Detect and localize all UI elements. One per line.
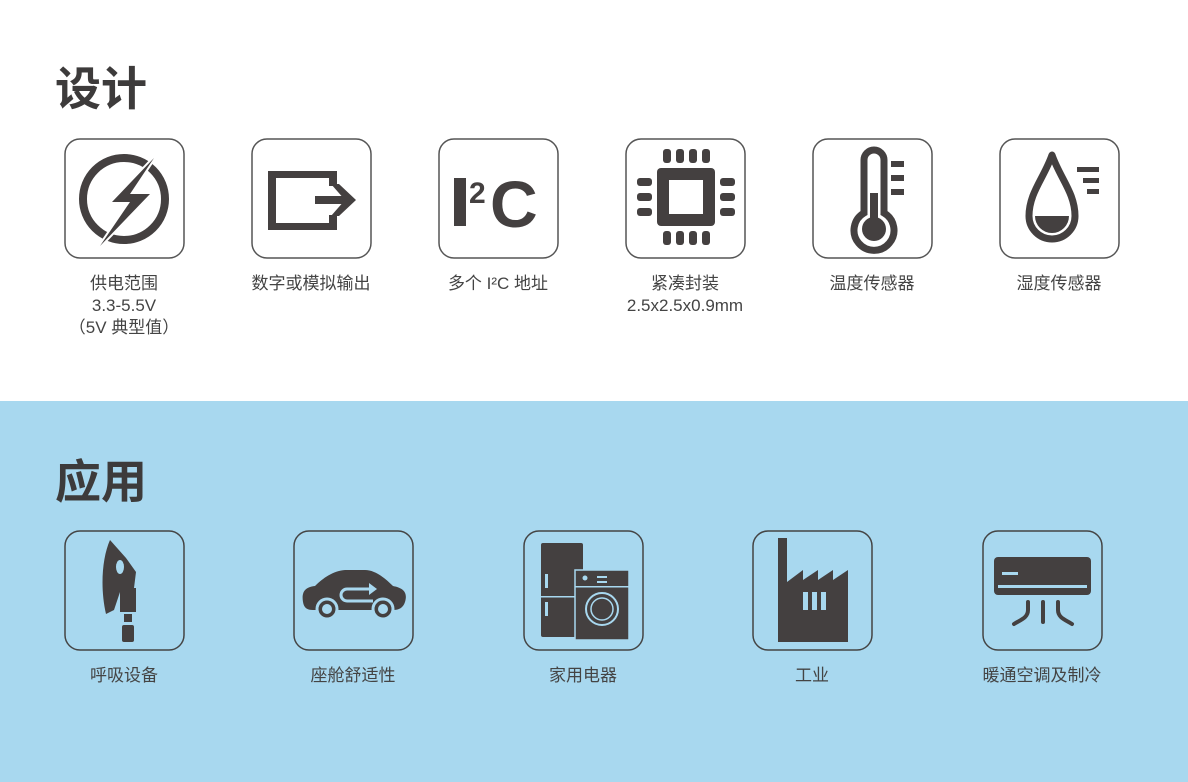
icon: car — [293, 530, 414, 651]
label: respiratory: 呼吸设备 — [90, 666, 158, 685]
icon: factory — [752, 530, 873, 651]
label: humidity: 湿度传感器 — [1016, 274, 1102, 293]
icon: power — [64, 138, 185, 259]
label: package: 紧凑封装 — [651, 274, 719, 293]
label: temperature: 温度传感器 — [830, 274, 914, 293]
blue background section — [0, 401, 1188, 782]
icon: thermometer — [812, 138, 933, 259]
icon: respiratory mask — [64, 530, 185, 651]
label: HVAC: 暖通空调及制冷 — [982, 666, 1102, 685]
label: appliances: 家用电器 — [549, 666, 617, 685]
icon: I2C: 2 — [469, 177, 486, 210]
label: power: 3.3-5.5V — [92, 296, 156, 315]
label: power: 供电范围 — [90, 274, 158, 293]
label: power: （5V 典型值） — [69, 318, 179, 337]
icon: output — [251, 138, 372, 259]
icon: I2C: C — [490, 167, 538, 241]
label: output: 数字或模拟输出 — [252, 274, 370, 293]
icon: humidity — [999, 138, 1120, 259]
label: package: 2.5x2.5x0.9mm — [627, 296, 743, 315]
icon: appliances — [523, 530, 644, 651]
label: package — [627, 274, 743, 315]
label: industry: 工业 — [795, 666, 829, 685]
label: I2C: 多个 I²C 地址 — [448, 274, 548, 293]
icon: I2C — [438, 138, 559, 259]
icon: air conditioner — [982, 530, 1103, 651]
label: power — [69, 274, 179, 337]
label: cabin: 座舱舒适性 — [310, 666, 396, 685]
title: 应用: 应用 — [55, 456, 147, 508]
icon: chip — [625, 138, 746, 259]
title: 设计: 设计 — [55, 63, 147, 115]
